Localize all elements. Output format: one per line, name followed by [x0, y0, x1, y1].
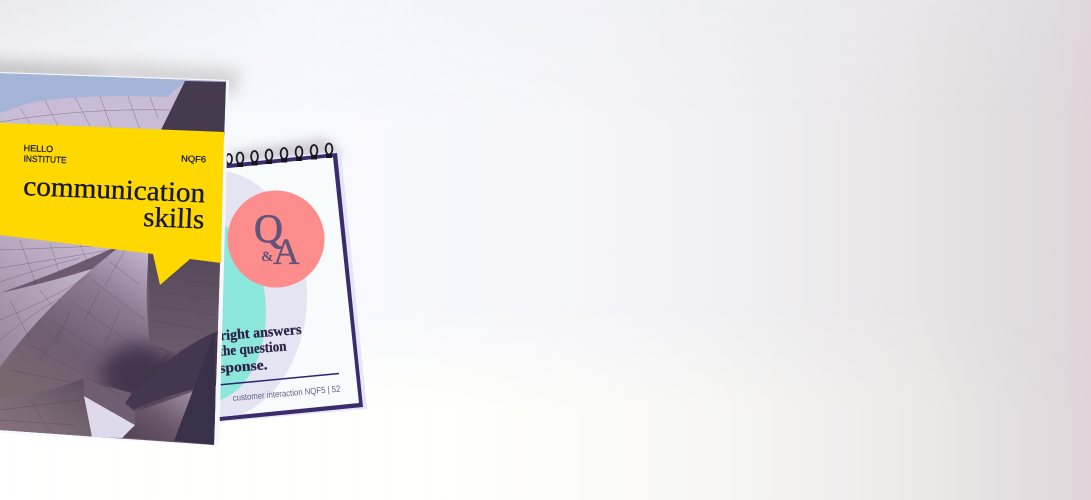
- publisher name: HELLO: [23, 143, 53, 154]
- mint arc: [220, 226, 266, 400]
- book page edge: [0, 72, 229, 446]
- icon: Q and A circle: [228, 190, 324, 288]
- notebook cover edge: [218, 151, 367, 422]
- book top shadow: [0, 60, 115, 80]
- yellow speech banner: [0, 123, 224, 285]
- lower left shell: [0, 378, 92, 440]
- lavender arc: [220, 172, 307, 417]
- dark shell right: [148, 250, 221, 352]
- prompt text: [221, 327, 302, 376]
- book: communication skills: [0, 72, 229, 446]
- icon: Q and A circle: A: [273, 232, 300, 273]
- purple wedge: [120, 392, 192, 442]
- dark shell top right: [160, 81, 226, 135]
- central shell shadow: [102, 343, 178, 407]
- book title: communication: [23, 171, 206, 209]
- book title: [23, 171, 206, 235]
- prompt text: to the question: [204, 339, 287, 361]
- notebook top shadow: [230, 138, 345, 165]
- central shell: [0, 248, 167, 403]
- tile lines: [0, 96, 218, 432]
- icon: Q and A circle: Q: [254, 206, 283, 251]
- divider rule: [218, 374, 339, 385]
- book title: skills: [143, 202, 205, 235]
- prompt text: the right answers: [197, 322, 302, 346]
- dark right blade: [174, 333, 216, 445]
- lit panel: [84, 396, 135, 438]
- publisher name: [23, 143, 206, 165]
- footer label: customer interaction NQF5 | 52: [232, 384, 341, 403]
- icon: Q and A circle: &: [261, 249, 274, 265]
- prompt text: response.: [205, 357, 268, 378]
- publisher name: INSTITUTE: [23, 154, 67, 165]
- lower base: [0, 248, 220, 445]
- sky: [0, 73, 226, 140]
- light shell lower left: [0, 235, 112, 293]
- second shell band: [0, 268, 95, 367]
- cover photo: architectural shells: [0, 73, 226, 445]
- level label: NQF6: [181, 154, 206, 165]
- light shell top: [0, 83, 184, 130]
- notebook page: [219, 157, 359, 417]
- notebook: Q and A flip pad: [220, 142, 367, 422]
- upper face over lit panel: [83, 380, 135, 425]
- dark blades: [125, 330, 220, 410]
- spiral binding: [226, 144, 332, 167]
